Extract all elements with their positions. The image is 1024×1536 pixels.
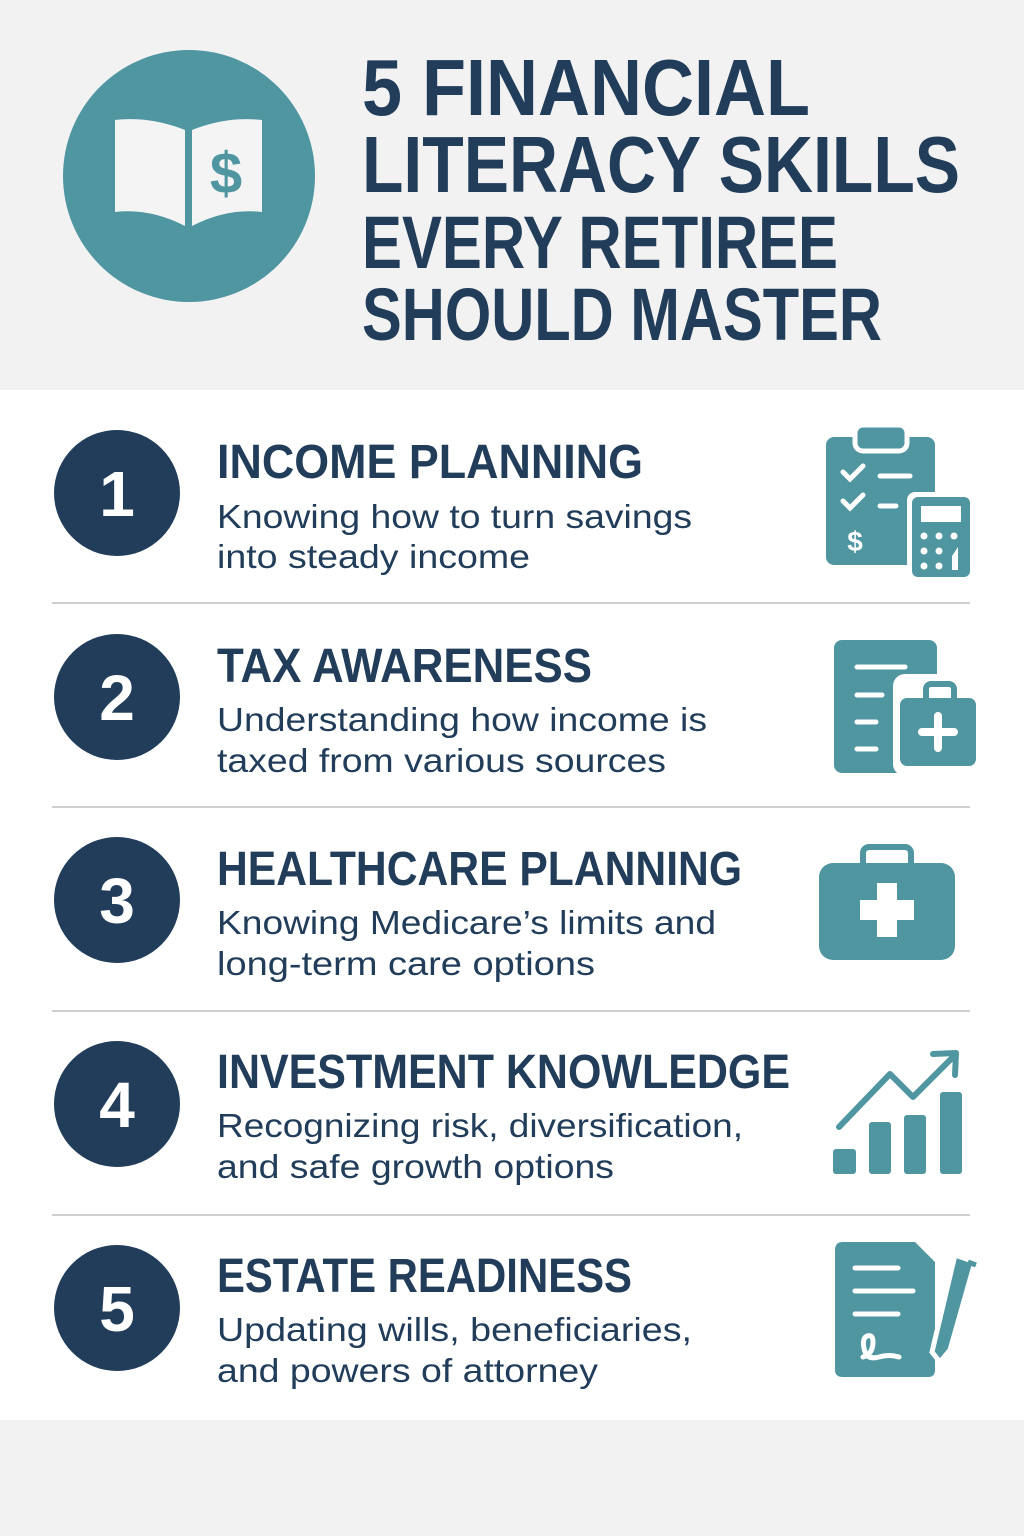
- icon: book logo: $: [210, 141, 242, 206]
- panel: item 5 estate readiness: [54, 1242, 976, 1389]
- icon: medical kit: [819, 847, 955, 960]
- title: [362, 43, 960, 356]
- description 1: [217, 498, 692, 575]
- panel: item 1 income planning: [54, 425, 975, 582]
- panel: item 2 tax awareness: [54, 634, 983, 779]
- number badge 3: 3: [99, 865, 135, 937]
- panel: item 4 investment knowledge: [54, 1041, 962, 1185]
- description 2: Understanding how income is: [217, 701, 707, 738]
- heading 3: HEALTHCARE PLANNING: [217, 843, 742, 896]
- description 2: [217, 701, 707, 779]
- panel: content background: [0, 390, 1024, 1420]
- title: SHOULD MASTER: [362, 273, 882, 356]
- number badge 1: 1: [99, 458, 135, 530]
- description 3: Knowing Medicare’s limits and: [217, 904, 716, 941]
- icon: clipboard and calculator: $: [847, 526, 863, 557]
- description 5: and powers of attorney: [217, 1352, 599, 1389]
- heading 2: TAX AWARENESS: [217, 640, 592, 693]
- number badge 5: [54, 1245, 180, 1371]
- number badge 2: 2: [99, 662, 135, 734]
- heading 4: INVESTMENT KNOWLEDGE: [217, 1046, 790, 1099]
- description 5: [217, 1311, 692, 1389]
- title: EVERY RETIREE: [362, 201, 838, 284]
- number badge 2: [54, 634, 180, 760]
- panel: item 3 healthcare planning: [54, 837, 955, 982]
- icon: document with pen: [835, 1242, 976, 1377]
- description 3: long-term care options: [217, 945, 595, 982]
- heading 5: ESTATE READINESS: [217, 1250, 632, 1303]
- title: 5 FINANCIAL: [362, 43, 810, 132]
- description 5: Updating wills, beneficiaries,: [217, 1311, 692, 1348]
- description 3: [217, 904, 716, 982]
- number badge 4: [54, 1041, 180, 1167]
- description 1: Knowing how to turn savings: [217, 498, 692, 535]
- description 4: [217, 1107, 743, 1185]
- description 4: Recognizing risk, diversification,: [217, 1107, 743, 1144]
- description 4: and safe growth options: [217, 1148, 614, 1185]
- icon: book logo: [63, 50, 315, 302]
- number badge 3: [54, 837, 180, 963]
- icon: document and briefcase: [834, 640, 983, 776]
- number badge 5: 5: [99, 1273, 135, 1345]
- icon: growth chart: [833, 1053, 962, 1174]
- number badge 4: 4: [99, 1069, 135, 1141]
- description 1: into steady income: [217, 538, 530, 575]
- description 2: taxed from various sources: [217, 742, 666, 779]
- heading 1: INCOME PLANNING: [217, 436, 643, 489]
- number badge 1: [54, 430, 180, 556]
- icon: clipboard and calculator: [826, 425, 975, 582]
